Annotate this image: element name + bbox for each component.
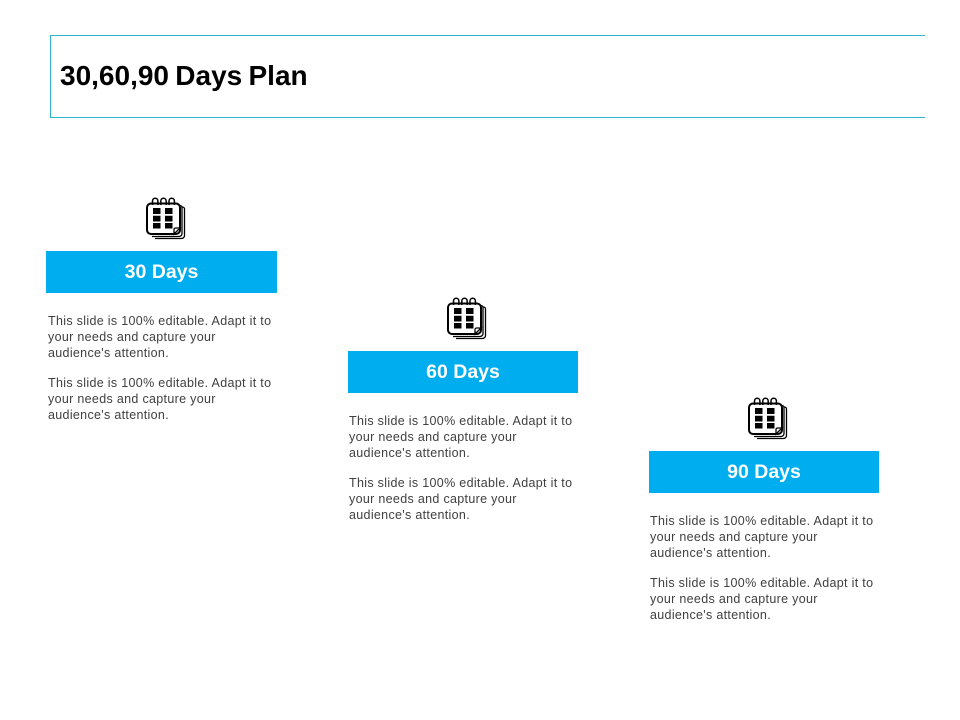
text block [349,414,572,460]
text block: your needs and capture your [650,592,818,606]
header bar: 90 Days: 90 Days [727,461,801,483]
text block: This slide is 100% editable. Adapt it to [349,414,572,428]
panel: 30 days [46,198,277,422]
header bar: 30 Days: 30 Days [125,261,198,283]
icon: calendar [447,298,486,340]
text block: your needs and capture your [48,330,216,344]
icon: calendar [146,198,186,240]
text block [48,314,271,360]
text block: your needs and capture your [650,530,818,544]
header bar: 30 Days [46,251,277,293]
text block: audience's attention. [48,408,169,422]
text block: your needs and capture your [349,492,517,506]
text block: This slide is 100% editable. Adapt it to [48,376,271,390]
text block [650,514,873,560]
text block: This slide is 100% editable. Adapt it to [349,476,572,490]
text block: your needs and capture your [48,392,216,406]
text block: This slide is 100% editable. Adapt it to [650,514,873,528]
title box [50,35,925,118]
title: 30,60,90 Days Plan [60,60,308,91]
panel: 90 days [649,398,879,622]
header bar: 60 Days: 60 Days [426,361,500,383]
icon: calendar [748,398,788,440]
text block: audience's attention. [650,546,771,560]
panel: 60 days [348,298,578,522]
text block: audience's attention. [48,346,169,360]
text block: audience's attention. [349,446,470,460]
text block: audience's attention. [650,608,771,622]
text block [48,376,271,422]
text block: This slide is 100% editable. Adapt it to [650,576,873,590]
header bar: 90 Days [649,451,879,493]
text block [650,576,873,622]
text block: This slide is 100% editable. Adapt it to [48,314,271,328]
text block: your needs and capture your [349,430,517,444]
header bar: 60 Days [348,351,578,393]
text block [349,476,572,522]
text block: audience's attention. [349,508,470,522]
